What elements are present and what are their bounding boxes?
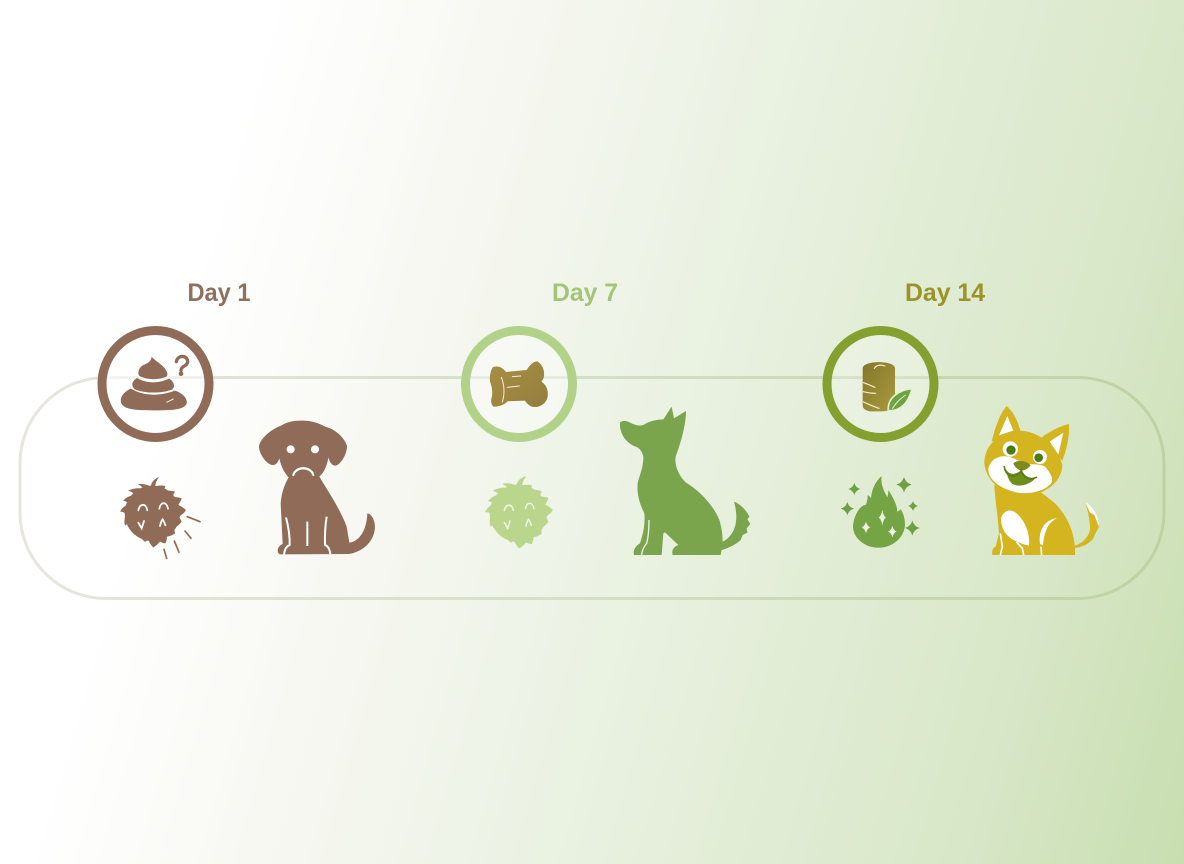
rounded timeline track [20,378,1164,598]
dog: sad brown puppy [259,421,375,555]
icon: shedding fur ball [120,477,200,558]
ring: Day 14 [827,330,934,438]
heading: Day 7: Day 7 [552,279,618,307]
heading: Day 1: Day 1 [188,279,251,307]
stage: Day 7 [466,279,750,555]
icon: green flame with sparkles [841,476,920,548]
ring: Day 1 [102,330,209,438]
ring: Day 7 [466,330,572,438]
icon: log with leaf [863,362,912,411]
stage: Day 1 [102,279,375,558]
stage: Day 14 [827,279,1099,555]
dog: alert green dog silhouette [620,407,750,555]
icon: dog treat [490,361,548,407]
icon: fluffy fur ball [486,477,552,548]
icon: poop with question mark [121,356,188,410]
heading: Day 14: Day 14 [905,279,985,307]
dog: happy golden shiba [984,406,1099,555]
